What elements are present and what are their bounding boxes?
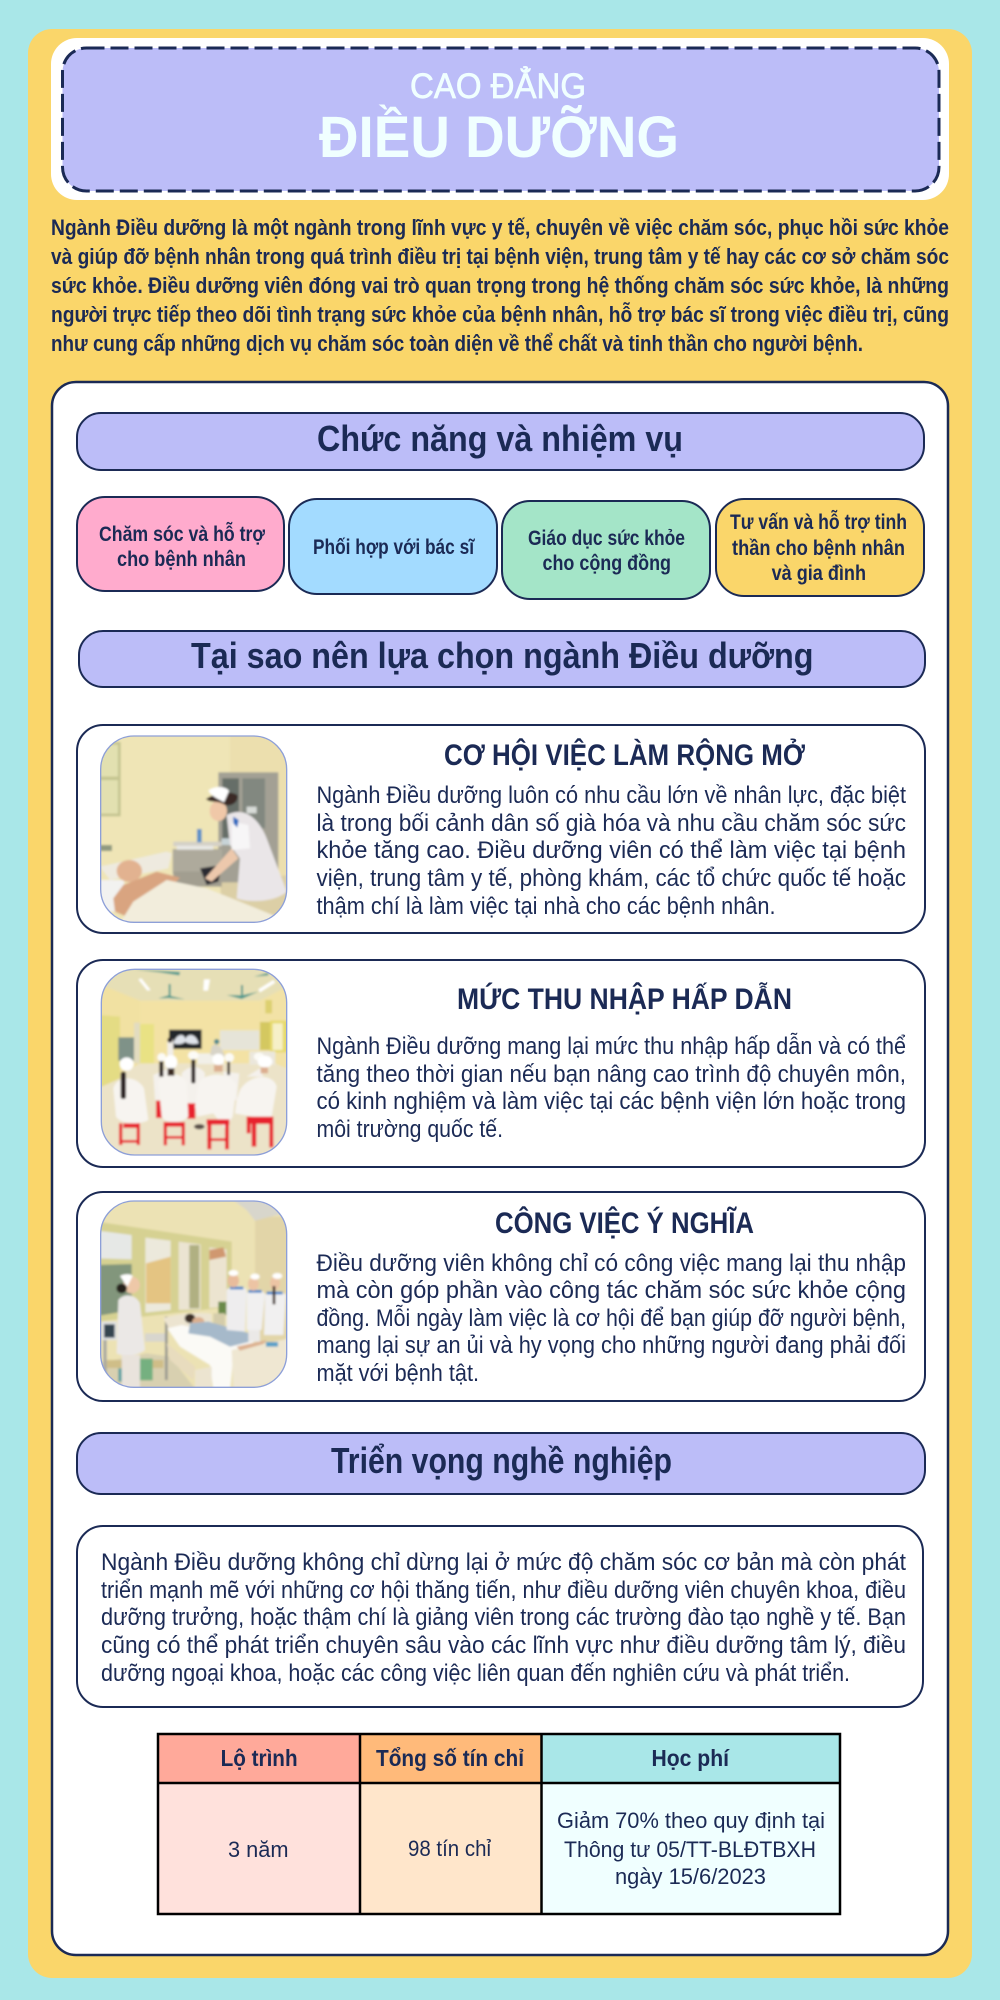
card: community health education [502, 501, 710, 599]
bed [163, 1313, 212, 1330]
table: programme summary: 3 năm [228, 1837, 289, 1862]
text: meaningful work [316, 1250, 906, 1387]
white content panel [52, 382, 948, 1955]
text: meaningful work: mặt với bệnh tật. [316, 1360, 479, 1387]
table: programme summary: 98 tín chỉ [408, 1836, 491, 1861]
text: wide job opportunities: viện, trung tâm y tế, phòng khám, các tổ chức quốc tế hoặc [316, 865, 906, 892]
table: programme summary: Thông tư 05/TT-BLĐTBXH [564, 1837, 816, 1862]
text: meaningful work: mà còn góp phần vào công tác chăm sóc sức khỏe cộng [316, 1277, 906, 1304]
panel: attractive income [77, 960, 925, 1167]
card: patient care: cho bệnh nhân [117, 548, 246, 571]
panel: career prospects text: dưỡng trưởng, hoặc thậm chí là giảng viên trong các trường đào tạo nghề y tế. Bạn [101, 1604, 906, 1631]
heading: attractive income: MỨC THU NHẬP HẤP DẪN [457, 982, 792, 1016]
card: mental support [716, 499, 924, 596]
heading: career prospects [77, 1433, 925, 1494]
heading: functions and duties [77, 413, 924, 470]
text: meaningful work: mang lại sự an ủi và hy vọng cho những người đang phải đối [316, 1332, 906, 1359]
card: community health education: Giáo dục sức khỏe [528, 527, 685, 550]
heading: wide job opportunities: CƠ HỘI VIỆC LÀM RỘNG MỞ [444, 738, 805, 772]
text: wide job opportunities: là trong bối cảnh dân số già hóa và nhu cầu chăm sóc sức [316, 810, 906, 837]
table: programme summary: Lộ trình [221, 1745, 298, 1771]
panel: career prospects text: Ngành Điều dưỡng không chỉ dừng lại ở mức độ chăm sóc cơ bản mà còn phát [101, 1549, 906, 1576]
nurse on left [117, 1295, 145, 1356]
card: patient care [77, 497, 284, 591]
table: programme summary: Giảm 70% theo quy định tại [557, 1808, 825, 1833]
text: attractive income [316, 1033, 906, 1143]
text: meaningful work: đồng. Mỗi ngày làm việc là cơ hội để bạn giúp đỡ người bệnh, [316, 1305, 906, 1332]
text: wide job opportunities: thậm chí là làm việc tại nhà cho các bệnh nhân. [316, 893, 776, 920]
card: doctor coordination [289, 499, 497, 594]
card: mental support: Tư vấn và hỗ trợ tinh [730, 510, 907, 534]
heading: why choose nursing [79, 631, 925, 687]
heading: functions and duties: Chức năng và nhiệm vụ [317, 418, 683, 459]
intro paragraph: như cung cấp những dịch vụ chăm sóc toàn diện về thể chất và tinh thần cho người bệnh. [51, 331, 863, 356]
text: meaningful work: Điều dưỡng viên không chỉ có công việc mang lại thu nhập [316, 1250, 906, 1277]
panel: career prospects text: triển mạnh mẽ với những cơ hội thăng tiến, như điều dưỡng viên chuyên khoa, điều [101, 1577, 906, 1604]
intro paragraph [51, 215, 949, 356]
panel: career prospects text [77, 1526, 923, 1707]
heading: why choose nursing: Tại sao nên lựa chọn ngành Điều dưỡng [191, 635, 814, 676]
text: attractive income: tăng theo thời gian nếu bạn nâng cao trình độ chuyên môn, [316, 1061, 906, 1088]
card: mental support: và gia đình [772, 562, 866, 585]
table: programme summary: ngày 15/6/2023 [615, 1864, 766, 1889]
title banner [51, 38, 949, 200]
text: attractive income: môi trường quốc tế. [316, 1116, 503, 1143]
text: wide job opportunities: khỏe tăng cao. Điều dưỡng viên có thể làm việc tại bệnh [316, 837, 906, 864]
text: wide job opportunities [316, 782, 906, 920]
card: patient care: Chăm sóc và hỗ trợ [99, 522, 265, 546]
text: wide job opportunities: Ngành Điều dưỡng luôn có nhu cầu lớn về nhân lực, đặc biệt [316, 782, 906, 809]
title: small line: CAO ĐẲNG [410, 66, 586, 106]
photo: nursing students in classroom [98, 966, 290, 1158]
card: community health education: cho cộng đồng [542, 552, 671, 575]
standing students [227, 1286, 247, 1332]
photo: nurse with patient manikin [97, 733, 290, 926]
card: mental support: thần cho bệnh nhân [732, 537, 905, 560]
panel: meaningful work [77, 1192, 925, 1401]
card: doctor coordination: Phối hợp với bác sĩ [313, 536, 475, 559]
panel: career prospects text: cũng có thể phát triển chuyên sâu vào các lĩnh vực như điều dưỡng tâm lý, điều [101, 1632, 906, 1659]
panel: career prospects text: dưỡng ngoại khoa, hoặc các công việc liên quan đến nghiên cứu và phát triển. [101, 1660, 850, 1687]
title: large line: ĐIỀU DƯỠNG [319, 105, 679, 170]
table: programme summary [158, 1734, 840, 1914]
students, back row [153, 1068, 169, 1100]
panel: wide job opportunities [77, 725, 925, 933]
heading: meaningful work: CÔNG VIỆC Ý NGHĨA [495, 1206, 754, 1240]
students, front row [113, 1078, 148, 1123]
heading: career prospects: Triển vọng nghề nghiệp [331, 1440, 672, 1481]
text: attractive income: Ngành Điều dưỡng mang lại mức thu nhập hấp dẫn và có thể [316, 1033, 906, 1060]
table: programme summary: Tổng số tín chỉ [376, 1745, 524, 1771]
text: attractive income: có kinh nghiệm và làm việc tại các bệnh viện lớn hoặc trong [316, 1088, 906, 1115]
photo: nurses at a hospital bed [97, 1198, 290, 1391]
table: programme summary: Học phí [652, 1745, 730, 1771]
